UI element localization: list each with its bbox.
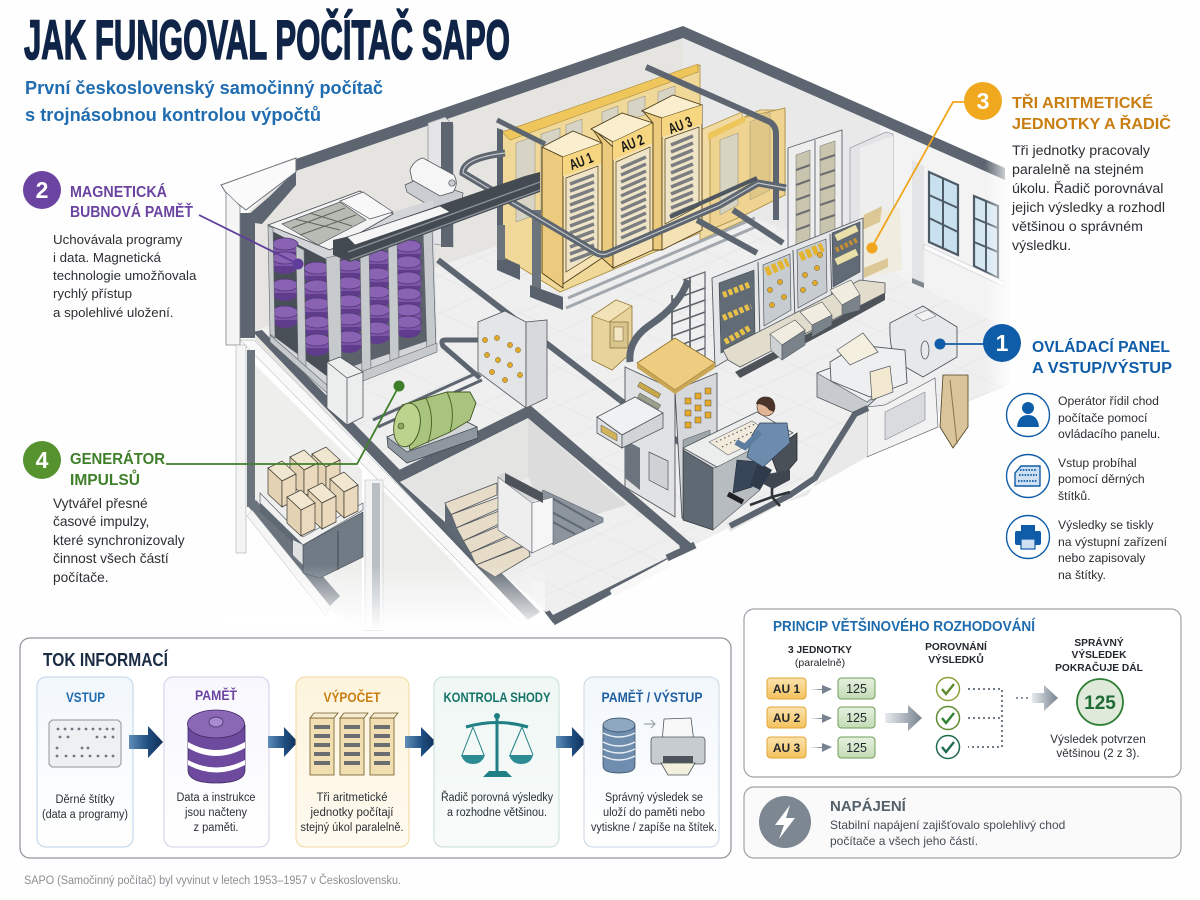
body: výsledku. [1012,238,1071,254]
body: technologie umožňovala [53,268,197,283]
folder by door [940,375,968,448]
row 3: 125 [846,741,867,755]
body: Tři jednotky pracovaly [1012,143,1151,159]
AU 3 cabinet: AU 3 [666,114,695,138]
callout 1: control panel and I/O [934,324,1172,582]
badge [23,171,61,209]
dotted connector [968,689,1002,747]
column headings: (paralelně) [795,657,845,669]
arrow [268,727,298,757]
body: Stabilní napájení zajišťovalo spolehlivý chod [830,818,1065,832]
row 2 [767,707,875,728]
body: počítače a všech jeho částí. [830,834,978,848]
icon: punched card [49,720,121,767]
body: které synchronizovaly [53,533,185,548]
icon: punched card [1006,454,1050,498]
check marks [936,678,960,758]
card: consistency check: KONTROLA SHODY [444,689,551,705]
column headings: 3 JEDNOTKY [788,645,852,656]
white junction box [327,357,363,425]
icon: three cabinets [310,713,398,775]
staircase [445,472,603,577]
icon: blue drum [603,718,635,773]
column headings: SPRÁVNÝ [1074,636,1124,649]
card: computation: stejný úkol paralelně. [300,822,404,834]
bottom white fade of the cutaway [225,565,545,630]
card: memory: z paměti. [194,822,238,834]
card: memory: PAMĚŤ [195,686,237,703]
card: computation: VÝPOČET [324,688,381,705]
leader line [940,343,985,345]
title: JAK FUNGOVAL POČÍTAČ SAPO [24,8,510,71]
panel: information flow [20,638,731,858]
AU 2 cabinet [591,113,653,268]
card: input [37,677,133,847]
text: punched card: štítků. [1058,489,1091,503]
heading: TOK INFORMACÍ [43,649,169,670]
card: memory: Data a instrukce [176,792,256,804]
right wall windows [912,160,1005,288]
text: printer: na výstupní zařízení [1058,535,1168,549]
operator desk [683,412,793,530]
card: consistency check [434,677,559,847]
subtitle: První československý samočinný počítač [25,78,383,98]
footnote: SAPO (Samočinný počítač) byl vyvinut v letech 1953–1957 v Československu. [24,874,401,887]
arrow [405,727,436,757]
lower feeds and pipe network [463,153,786,310]
body: časové impulzy, [53,514,149,529]
callout 3: arithmetic units [866,82,1171,254]
badge [983,324,1021,362]
callout 3: arithmetic units: 3 [977,88,989,114]
operator tower [597,338,717,518]
result caption: většinou (2 z 3). [1056,747,1140,760]
row 1: 125 [846,682,867,696]
overhang box [597,397,663,435]
callout 1: control panel and I/O: A VSTUP/VÝSTUP [1032,359,1172,377]
card: memory / output: uloží do paměti nebo [603,807,705,819]
card: memory / output [584,677,719,847]
drums, left face [272,238,330,356]
body: Uchovávala programy [53,232,183,247]
connection duct [333,172,540,262]
magnetic drum memory rack [268,172,540,425]
text: operator: ovládacího panelu. [1058,427,1160,441]
ramp and floor duct [553,400,868,622]
callout 2: magnetic drum memory [23,171,304,320]
icon: printer [1006,516,1050,558]
wall beam to console area [438,260,620,400]
AU 1 cabinet: AU 1 [567,150,596,174]
text: punched card: Vstup probíhal [1058,456,1137,470]
callout 3: arithmetic units: JEDNOTKY A ŘADIČ [1012,115,1171,133]
card: input: VSTUP [66,689,105,705]
row 2: AU 2 [773,711,800,725]
right support [867,378,938,457]
operator at desk [728,397,797,506]
arrow [129,726,163,758]
callout 4: impulse generator [23,380,404,585]
storage boxes and cabinet [260,447,363,578]
text: punched card: pomocí děrných [1058,472,1145,486]
card: computation: jednotky počítají [310,807,394,819]
icon: balance scales [461,713,533,777]
text: printer: nebo zapisovaly [1058,551,1146,565]
body: i data. Magnetická [53,250,162,265]
card: memory / output: PAMĚŤ / VÝSTUP [602,688,702,705]
result circle: 125 [1084,693,1116,714]
text: operator: počítače pomocí [1058,411,1148,425]
body: jejich výsledky a rozhodl [1011,200,1165,216]
printer cylinder [890,306,957,377]
callout 2: magnetic drum memory: 2 [36,177,48,203]
callout 4: impulse generator: 4 [36,447,49,473]
column headings [788,636,1143,674]
row 1: AU 1 [773,682,800,696]
leader line [199,215,298,264]
body: úkolu. Řadič porovnával [1012,180,1163,197]
back wall yellow cabinet bank [497,64,785,292]
leader line [872,102,965,247]
result caption [1050,733,1146,760]
subtitle: s trojnásobnou kontrolou výpočtů [25,105,321,125]
text: printer: na štítky. [1058,568,1106,582]
AU 1 cabinet [542,131,602,288]
row 2: 125 [846,711,867,725]
body: počítače. [53,570,109,585]
heading: NAPÁJENÍ [830,798,907,815]
heading: TŘI ARITMETICKÉ [1012,94,1153,112]
console desk [723,280,885,378]
floor edge beams and stair opening [393,405,693,623]
panel: power supply [744,787,1181,858]
icon: lightning bolt [759,796,811,848]
card: input: Děrné štítky [56,794,115,806]
result caption: Výsledek potvrzen [1050,733,1146,746]
card: input: (data a programy) [42,809,128,821]
upper pipe and AU cabinets [463,67,786,310]
body: většinou o správném [1012,219,1143,235]
card: memory: jsou načteny [184,807,247,819]
tank unit on column [405,117,463,247]
floor [257,190,1010,617]
white cabinet with yellow trim [850,132,902,278]
AU 2 cabinet: AU 2 [618,132,647,156]
card reader and printer [817,306,957,457]
heading: PRINCIP VĚTŠINOVÉHO ROZHODOVÁNÍ [773,617,1036,635]
result circle [1077,679,1123,725]
heading: OVLÁDACÍ PANEL [1032,339,1170,356]
yellow terminal cabinet [592,300,632,370]
card: memory / output: vytiskne / zapíše na štítek. [591,822,717,834]
lower-left room [236,330,540,630]
pipe ring near panel [442,340,493,378]
arrow [556,727,586,757]
body: a spolehlivé uložení. [53,305,174,320]
icon: operator [1006,394,1050,436]
column headings: VÝSLEDKŮ [928,652,984,666]
back walls [221,26,1010,430]
leader line [166,386,399,464]
row 3 [767,737,875,758]
body: Vytvářel přesné [53,496,148,511]
arrow to result [1016,685,1058,711]
column headings: VÝSLEDEK [1072,648,1127,661]
badge [964,82,1002,120]
column headings: POROVNÁNÍ [925,640,988,653]
row 1 [767,678,875,699]
text: printer: Výsledky se tiskly [1058,518,1154,532]
green impulse generator [387,392,478,463]
free-standing control panel [478,311,547,408]
body: paralelně na stejném [1012,162,1144,178]
cable tray ladder [630,272,705,372]
card: computation [296,677,409,847]
subtitle [25,78,383,125]
illustration: cutaway computer hall [221,26,1015,630]
console panels [712,218,863,367]
column headings: POKRAČUJE DÁL [1055,661,1143,674]
gray cabinets at back [788,130,842,262]
base [817,367,880,417]
reader [830,345,907,397]
text: operator: Operátor řídil chod [1058,394,1159,408]
icon: purple drum [188,710,245,783]
card: consistency check: Řadič porovná výsledky [441,791,553,804]
drums, right face [336,240,421,353]
card: memory / output: Správný výsledek se [605,792,703,804]
arrow to comparison [885,705,922,731]
card: memory [164,677,269,847]
row 3: AU 3 [773,741,800,755]
callout 1: control panel and I/O: 1 [996,330,1009,356]
badge [23,441,61,479]
card: computation: Tři aritmetické [316,792,388,804]
body: činnost všech částí [53,551,169,566]
callout 2: magnetic drum memory: BUBNOVÁ PAMĚŤ [70,203,193,221]
panel: majority voting principle [744,609,1181,777]
body: rychlý přístup [53,286,132,301]
callout 4: impulse generator: IMPULSŮ [70,470,140,489]
heading: MAGNETICKÁ [70,184,167,201]
heading: GENERÁTOR [70,451,165,468]
icon: printer [651,718,705,775]
AU 3 cabinet [642,95,702,250]
card: consistency check: a rozhodne většinou. [447,807,547,819]
generator platform outline [373,373,482,427]
